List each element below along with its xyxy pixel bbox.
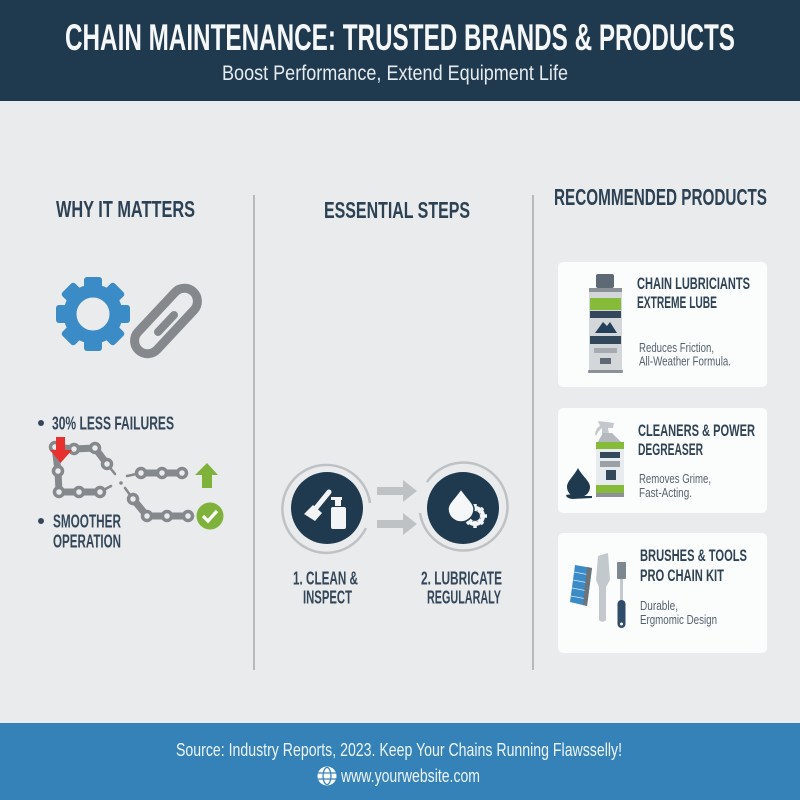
label: step 1	[293, 568, 358, 608]
product description: Fast-Acting.	[639, 485, 692, 500]
icon: small gear	[463, 504, 487, 528]
icon: scraper	[596, 553, 610, 622]
bullet: smoother operation: OPERATION	[53, 532, 121, 552]
panel: why it matters	[38, 196, 224, 552]
header banner	[0, 0, 800, 101]
product description: All-Weather Formula.	[639, 354, 731, 368]
icon: green check	[196, 502, 224, 530]
label: step 1: 1. CLEAN &	[293, 568, 358, 588]
product name: EXTREME LUBE	[637, 294, 717, 312]
arrow: top	[377, 480, 417, 502]
icon: paint brush	[304, 492, 329, 521]
website: www.yourwebsite.com	[340, 766, 480, 786]
product name	[640, 547, 747, 585]
label: step 2	[421, 568, 502, 608]
subtitle: Boost Performance, Extend Equipment Life	[222, 62, 568, 85]
icon: oil drop and puddle	[566, 468, 592, 499]
icon: lubricant bottle	[588, 274, 623, 373]
icon: blue gear	[56, 277, 130, 351]
icon: chain link	[129, 283, 203, 359]
panel: recommended products	[554, 184, 767, 653]
bullet: 30% less failures	[38, 414, 174, 434]
icon: spray bottle	[595, 421, 624, 497]
label: step 2: REGULARALY	[427, 588, 501, 608]
icon: oil drop	[448, 489, 474, 522]
icon: red down arrow	[50, 437, 72, 463]
product description	[639, 471, 711, 500]
icon: green up arrow	[195, 463, 218, 488]
product name	[638, 422, 755, 459]
footer banner	[0, 723, 800, 800]
product description	[639, 340, 731, 368]
label: step 1: INSPECT	[303, 588, 352, 608]
heading: why it matters: WHY IT MATTERS	[56, 196, 195, 222]
product description: Durable,	[640, 598, 678, 613]
product name	[637, 275, 750, 312]
product name: PRO CHAIN KIT	[640, 567, 724, 585]
icon: blue brush	[570, 565, 592, 606]
arrow: bottom	[377, 513, 417, 535]
step 1 icon: clean and inspect	[282, 465, 370, 553]
product name: BRUSHES & TOOLS	[640, 547, 747, 565]
product description	[640, 598, 717, 627]
source text: Source: Industry Reports, 2023. Keep Your Chains Running Flawsselly!	[176, 740, 622, 760]
bullet: smoother operation	[38, 512, 121, 552]
heading: essential steps: ESSENTIAL STEPS	[324, 197, 470, 223]
label: step 2: 2. LUBRICATE	[421, 568, 502, 588]
card: brushes and tools	[558, 533, 767, 653]
product description: Removes Grime,	[639, 471, 711, 486]
card: chain lubricants	[558, 262, 767, 387]
icon: chain diagram	[50, 442, 192, 520]
icon: spray can	[331, 497, 346, 529]
product name: DEGREASER	[638, 441, 703, 459]
bullet: smoother operation: SMOOTHER	[53, 512, 121, 532]
icon: small brush	[617, 562, 626, 628]
icon: globe	[318, 766, 336, 786]
card: cleaners and degreaser	[558, 408, 767, 513]
panel: essential steps	[282, 197, 508, 608]
bullet: 30% less failures: 30% LESS FAILURES	[52, 414, 174, 434]
product description: Reduces Friction,	[639, 340, 714, 355]
product description: Ergmomic Design	[640, 612, 717, 627]
step 2 icon: lubricate	[420, 463, 508, 551]
